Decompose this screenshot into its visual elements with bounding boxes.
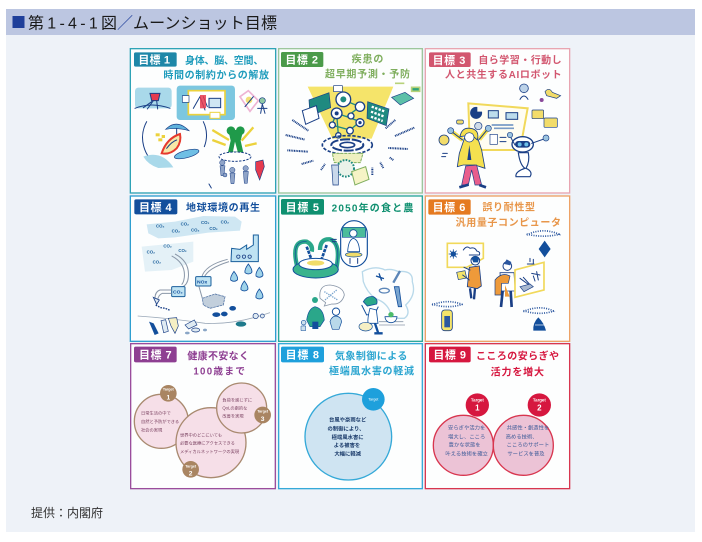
panel: goal 4: CO₂: [181, 221, 189, 226]
target 2: こころのサポート: [507, 441, 549, 449]
target circle: の制御により、: [328, 425, 364, 433]
target 3: [217, 383, 271, 433]
panel: goal 2: [279, 49, 422, 193]
target circle: 台風や豪雨など: [329, 416, 367, 424]
target circle: Target: [368, 398, 378, 402]
panel: goal 3: 目標 3: [433, 53, 465, 67]
panel: goal 2: 超早期予測・予防: [325, 67, 410, 80]
panel: goal 4: CO₂: [147, 249, 155, 254]
target 2: Target: [185, 464, 197, 468]
target 1: 安らぎや活力を: [448, 423, 485, 431]
panel: goal 4: 地球環境の再生: [186, 201, 260, 214]
panel: goal 9: こころの安らぎや: [476, 350, 559, 363]
panel: goal 7: 健康不安なく: [187, 350, 249, 363]
target 1: 1: [475, 404, 480, 413]
panel: goal 6: 誤り耐性型: [482, 200, 535, 213]
target 2: [493, 393, 553, 475]
panel: goal 5: 2050年の食と農: [332, 202, 413, 215]
target 3: QoLの劇的な: [222, 405, 247, 412]
panel: goal 4: CO₂: [156, 223, 164, 228]
panel: goal 4: CO₂: [191, 228, 199, 233]
target 3: 3: [261, 416, 265, 423]
target 1: Target: [471, 397, 484, 402]
target 1: [433, 393, 493, 475]
panel: goal 2: 目標 2: [285, 53, 318, 67]
header band: ／: [117, 16, 133, 32]
panel: goal 4: NOx: [197, 279, 207, 285]
panel: goal 7: [131, 344, 275, 489]
target 1: 豊かな状態を: [449, 441, 481, 449]
panel: goal 7: 目標 7: [139, 347, 172, 361]
panel: goal 8: 目標 8: [286, 347, 319, 361]
panel: goal 6: [425, 196, 570, 341]
target 2: 共感性・創造性を: [507, 423, 549, 431]
header band: [6, 9, 695, 35]
panel: goal 8: 気象制御による: [335, 349, 407, 362]
panel: goal 4: CO₂: [201, 220, 209, 225]
panel: goal 4: CO₂: [209, 226, 218, 231]
panel: goal 4: CO₂: [221, 220, 229, 225]
target 1: 自然と予防ができる: [141, 418, 179, 425]
target 3: 改善を実現: [222, 413, 244, 420]
target 1: 1: [166, 394, 170, 401]
panel: goal 6: 目標 6: [433, 200, 465, 214]
panel: goal 3: 人と共生するAIロボット: [445, 68, 562, 81]
panel: goal 7: 100歳まで: [193, 366, 245, 378]
panel: goal 5: 目標 5: [286, 200, 319, 214]
target 1: 社会の実現: [141, 426, 163, 433]
target circle: [305, 388, 392, 480]
target circle: よる被害を: [334, 441, 360, 449]
panel: goal 4: CO₂: [178, 248, 187, 253]
target 3: 負荷を感じずに: [222, 396, 252, 403]
target 1: Target: [163, 388, 175, 392]
panel: goal 3: 自ら学習・行動し: [478, 54, 562, 67]
panel: goal 1: 身体、脳、空間、: [185, 54, 263, 67]
target 3: Target: [257, 409, 269, 413]
panel: goal 4: CO₂: [163, 243, 172, 248]
panel: goal 1: [130, 49, 276, 193]
target 2: Target: [533, 397, 546, 402]
target 1: 日常生活の中で: [141, 410, 171, 417]
target 2: サービスを普及: [507, 449, 545, 457]
target 2: [176, 408, 246, 478]
panel: goal 4: 目標 4: [139, 200, 173, 214]
panel: goal 3: [425, 49, 570, 193]
panel: goal 8: [279, 344, 422, 489]
target 2: 2: [189, 470, 193, 477]
panel: goal 5: [279, 196, 422, 341]
panel: goal 4: CO₂: [172, 228, 180, 233]
panel: goal 4: CO₂: [153, 260, 161, 265]
header band: 第 1 - 4 - 1 図: [28, 14, 117, 32]
target 2: 高める技術、: [506, 432, 538, 440]
panel: goal 1: 時間の制約からの解放: [163, 69, 269, 82]
panel: goal 2: 疾患の: [352, 53, 383, 66]
target 1: 叶える技術を確立: [445, 449, 489, 457]
source note: 提供：内閣府: [31, 505, 103, 520]
panel: goal 1: 目標 1: [138, 53, 170, 67]
target 1: 増大し、こころ: [448, 432, 485, 440]
target 2: 必要な医療にアクセスできる: [180, 440, 235, 447]
panel: goal 6: 汎用量子コンピュータ: [456, 216, 561, 229]
panel: goal 9: 活力を増大: [491, 365, 544, 378]
target circle: 極端風水害に: [332, 433, 364, 441]
target 1: [134, 385, 188, 448]
panel: goal 8: 極端風水害の軽減: [329, 365, 414, 378]
panel: goal 9: 目標 9: [433, 347, 466, 361]
target circle: 大幅に軽減: [334, 450, 362, 458]
panel: goal 4: CO₂: [173, 290, 183, 296]
header band: ムーンショット目標: [133, 14, 277, 32]
panel: goal 4: [130, 196, 276, 341]
target 2: 世界中のどこにいても: [180, 431, 222, 438]
target 2: 2: [537, 404, 542, 413]
target 2: メディカルネットワークの実現: [180, 448, 240, 455]
panel: goal 9: [425, 344, 570, 489]
